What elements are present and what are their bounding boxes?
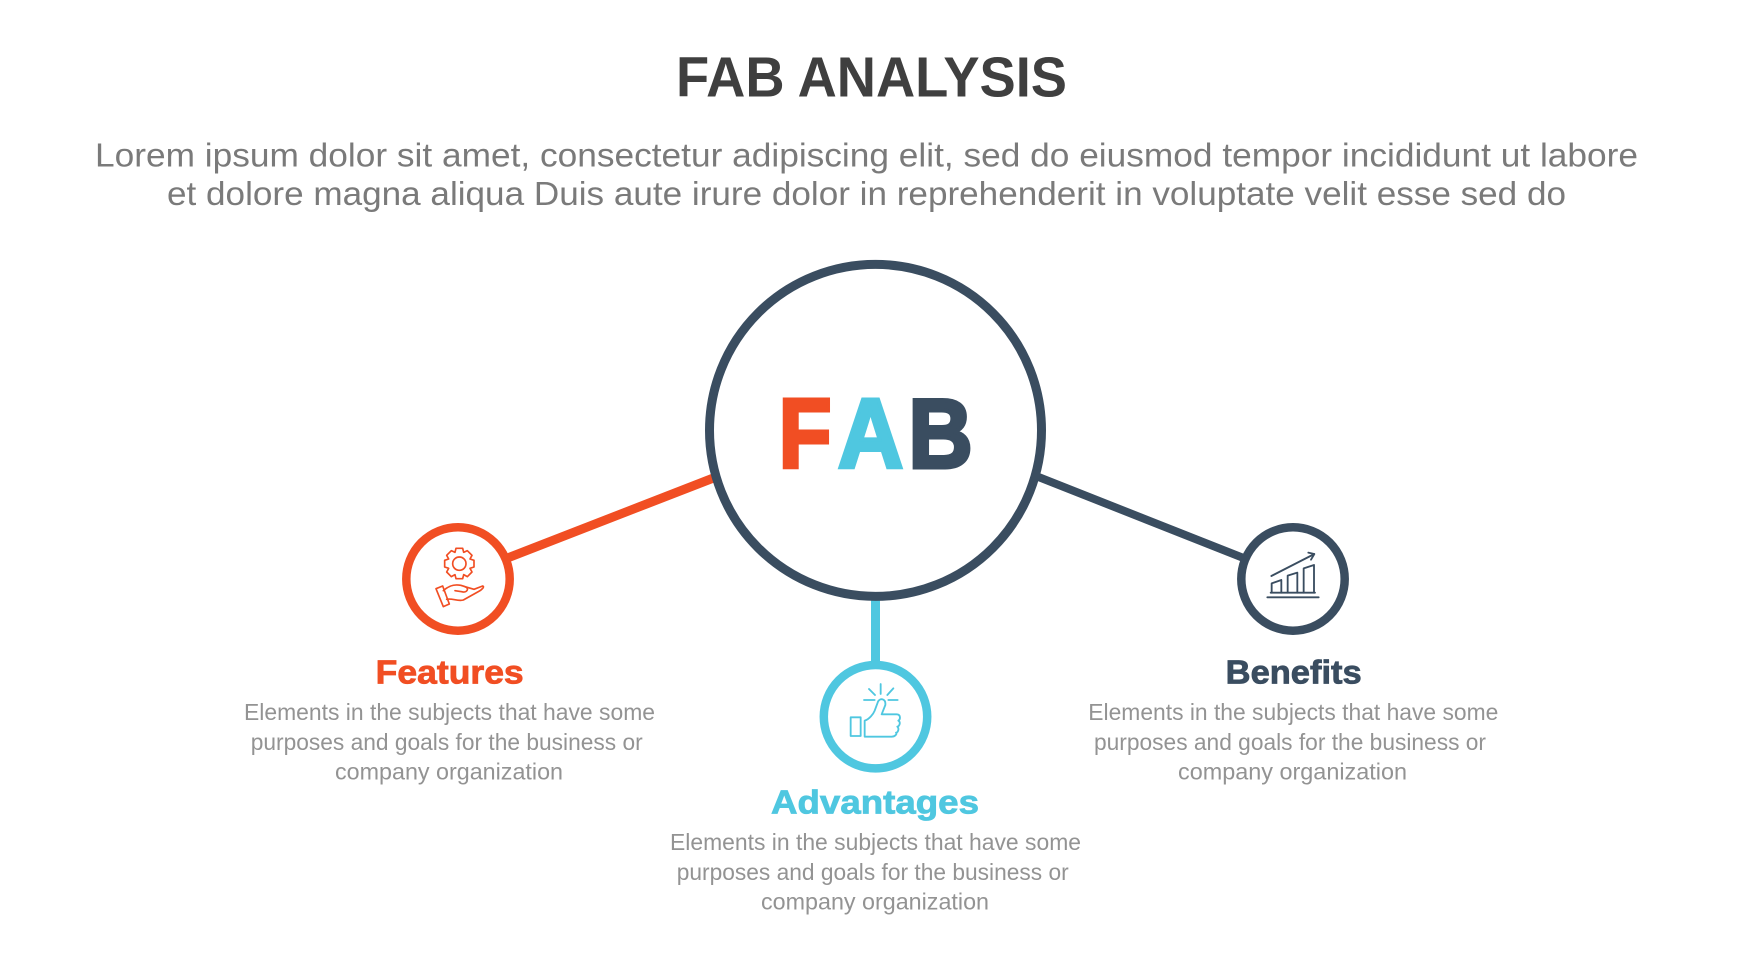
description: features: company organization xyxy=(335,758,563,784)
heading: advantages: Advantages xyxy=(771,783,979,820)
icon: gear on hand xyxy=(436,548,483,607)
description: advantages xyxy=(670,829,1081,914)
description: benefits: purposes and goals for the business or xyxy=(1094,729,1486,755)
description: features: Elements in the subjects that have some xyxy=(244,699,655,725)
heading: benefits: Benefits xyxy=(1226,653,1362,690)
panel: features xyxy=(244,527,655,784)
subtitle text block: et dolore magna aliqua Duis aute irure dolor in reprehenderit in voluptate velit esse sed do xyxy=(167,175,1566,212)
description: benefits: Elements in the subjects that have some xyxy=(1088,699,1498,725)
panel: benefits xyxy=(1088,527,1498,784)
description: advantages: company organization xyxy=(761,888,989,914)
FAB letter B: B xyxy=(908,378,973,488)
connector: features xyxy=(505,477,716,559)
subtitle text block: Lorem ipsum dolor sit amet, consectetur adipiscing elit, sed do eiusmod tempor incididunt ut labore xyxy=(95,137,1638,174)
FAB letter A: A xyxy=(838,379,903,488)
advantages ring xyxy=(824,665,927,768)
connector: benefits xyxy=(1036,476,1246,559)
benefits ring xyxy=(1241,527,1345,631)
description: benefits: company organization xyxy=(1178,758,1407,784)
description: features: purposes and goals for the business or xyxy=(251,729,643,755)
subtitle text block xyxy=(95,137,1638,212)
heading: features: Features xyxy=(376,653,524,690)
title: FAB ANALYSIS xyxy=(676,46,1067,110)
description: advantages: Elements in the subjects that have some xyxy=(670,829,1081,855)
icon: growth chart xyxy=(1267,553,1319,597)
icon: thumbs up xyxy=(851,684,900,737)
connector: advantages xyxy=(871,595,880,665)
features ring xyxy=(406,527,510,631)
description: features xyxy=(244,699,655,784)
description: advantages: purposes and goals for the business or xyxy=(677,859,1069,885)
panel: advantages xyxy=(670,665,1081,914)
FAB letter F: F xyxy=(779,378,831,489)
central circle xyxy=(710,264,1042,596)
description: benefits xyxy=(1088,699,1498,784)
